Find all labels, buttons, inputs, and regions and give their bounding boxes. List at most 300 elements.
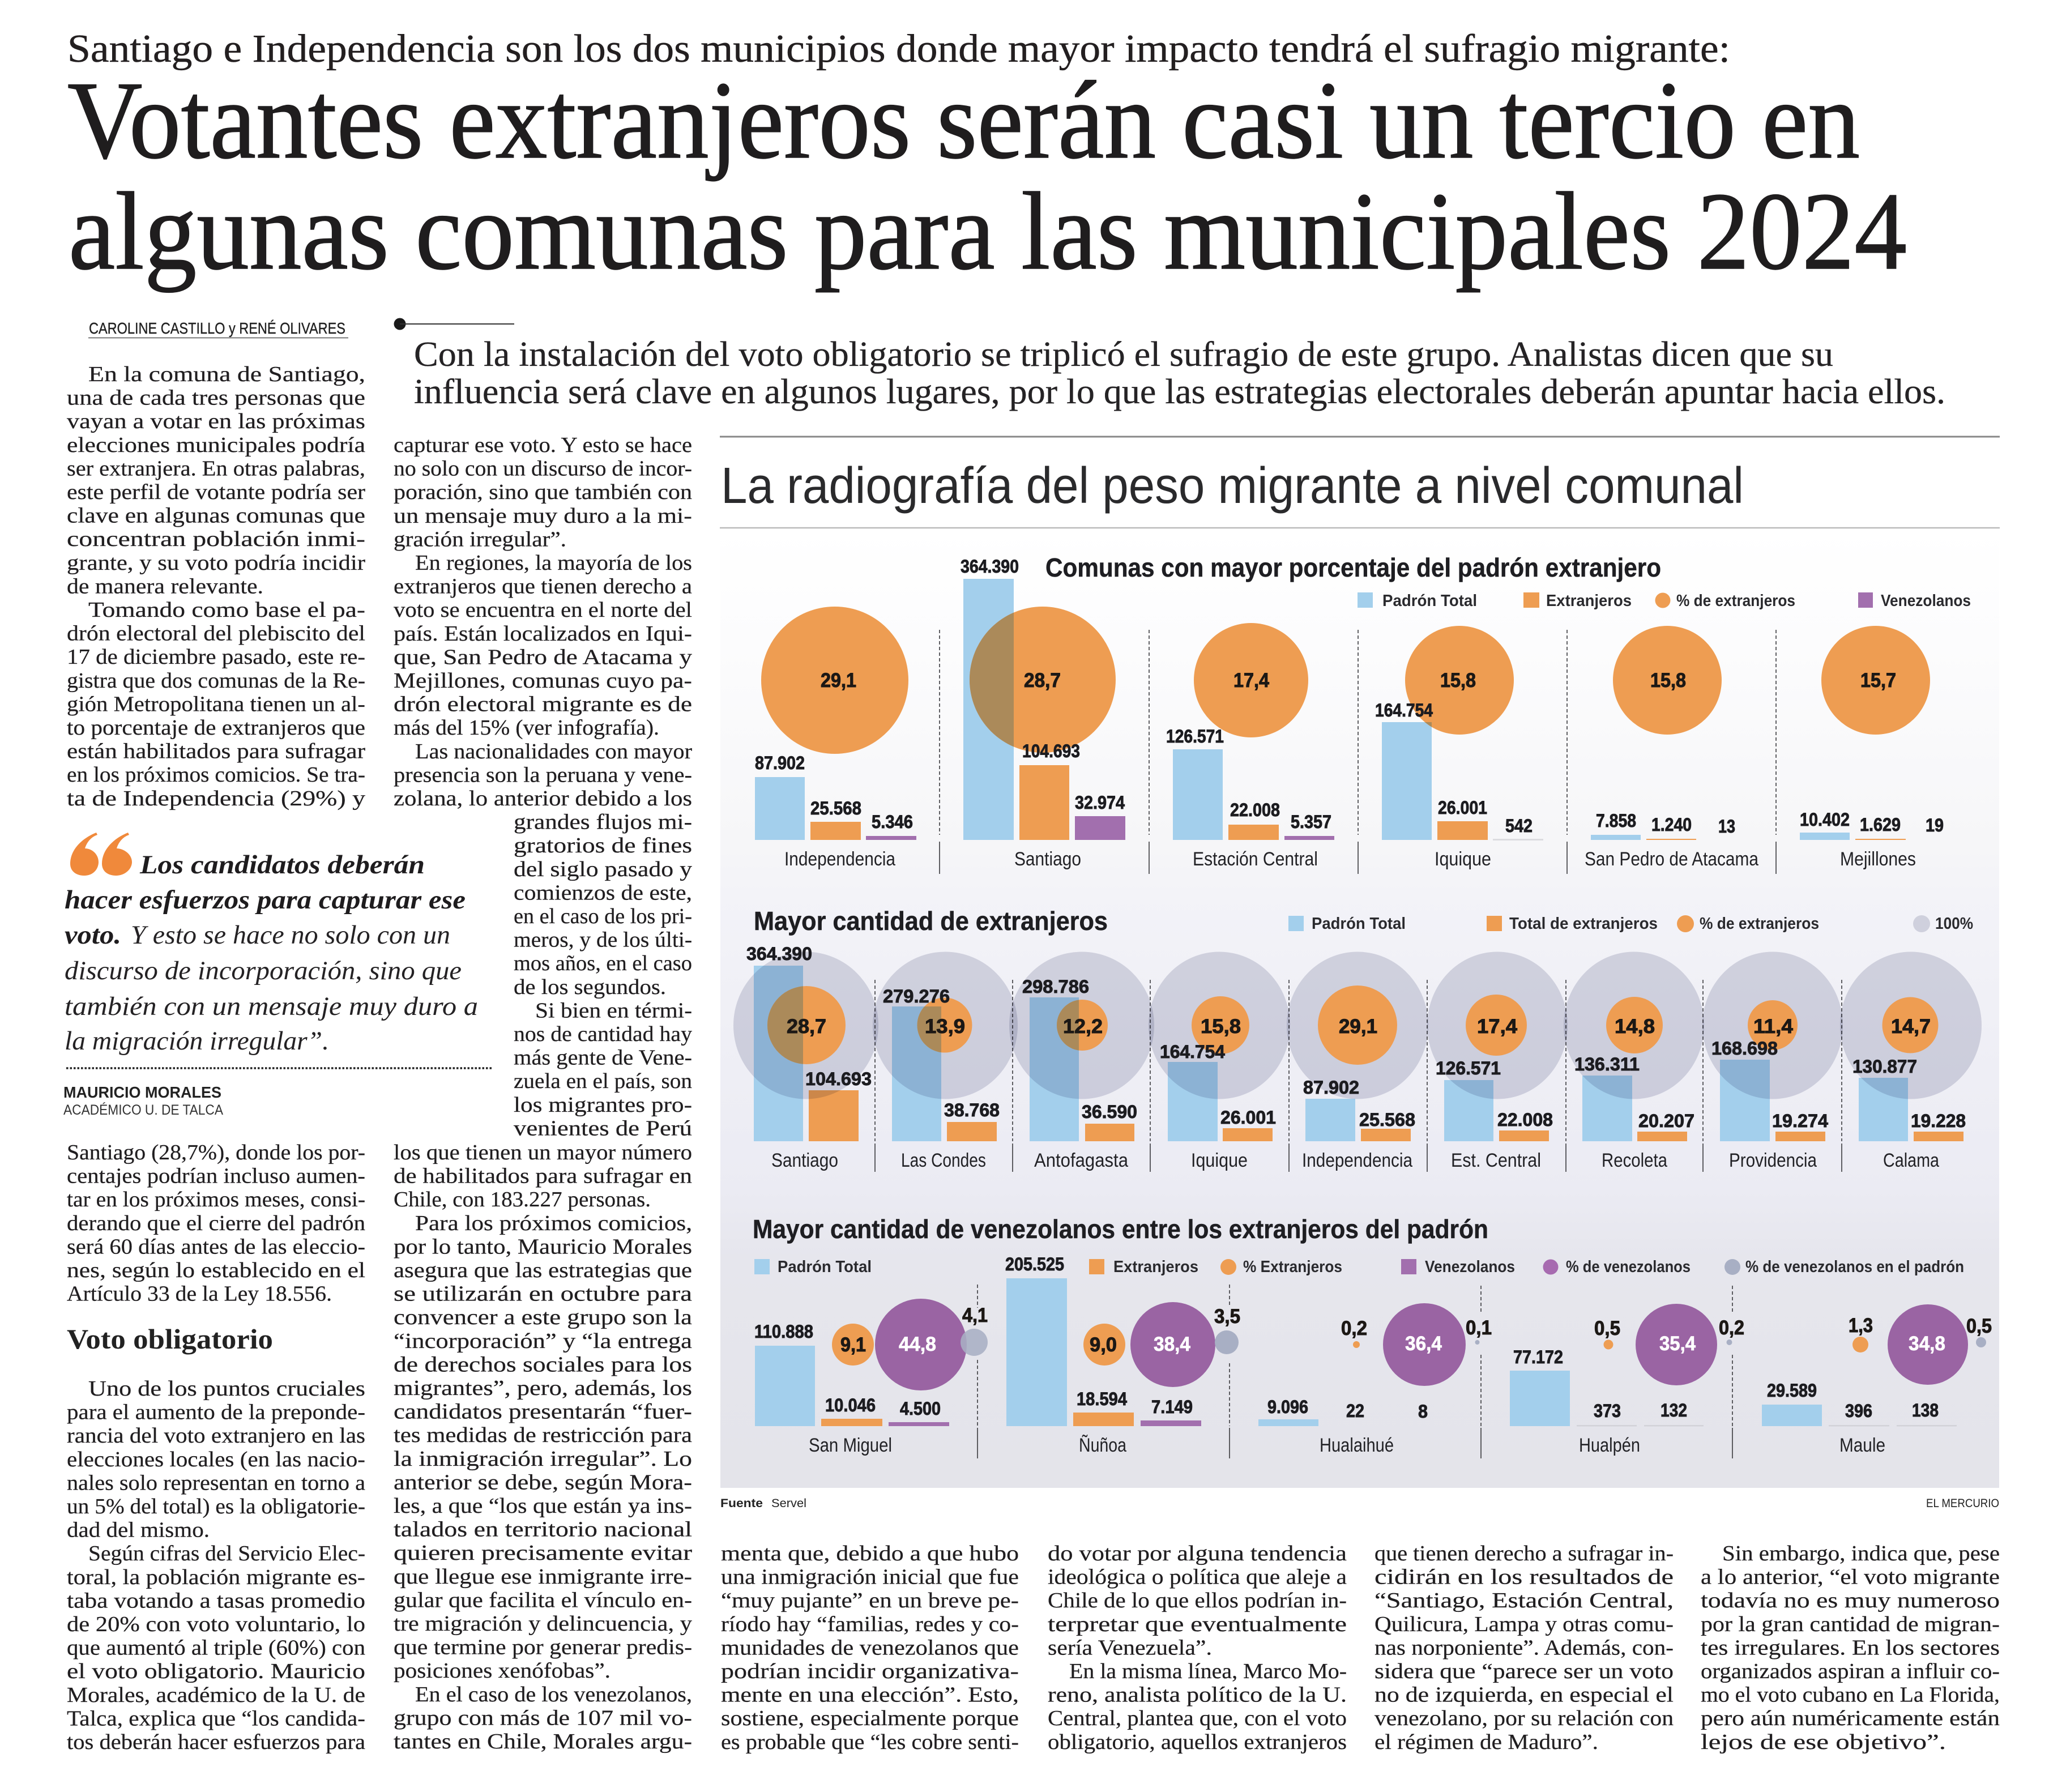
commune: Iquique: 164.754 <box>1160 1042 1225 1062</box>
commune: San Miguel: 44,8 <box>899 1333 936 1355</box>
article text: column 2: venientes de Perú <box>514 1116 692 1140</box>
article text: column 2: Para los próximos comicios, <box>415 1211 692 1235</box>
article text: column 6: por la gran cantidad de migran- <box>1701 1612 2000 1636</box>
article text: column 2: les, a que “los que están ya ins- <box>394 1494 692 1518</box>
commune: Ñuñoa: Ñuñoa <box>1079 1435 1126 1456</box>
commune: Providencia: 11,4 <box>1753 1016 1794 1038</box>
commune: Santiago: Santiago <box>771 1150 838 1171</box>
commune: Hualaihué: 9.096 <box>1267 1397 1308 1417</box>
article text: column 2: candidatos presentarán “fuer- <box>394 1400 692 1424</box>
commune: Antofagasta: 12,2 <box>1063 1016 1103 1038</box>
article text: column 2: Las nacionalidades con mayor <box>415 740 692 763</box>
article text: column 2: talados en territorio nacional <box>394 1518 692 1542</box>
chart 1 legend <box>1358 592 1971 610</box>
commune: Calama: 130.877 <box>1852 1056 1917 1077</box>
article text: column 4: En la misma línea, Marco Mo- <box>1069 1659 1347 1683</box>
title <box>67 59 1907 293</box>
chart 3 legend: Venezolanos <box>1425 1258 1515 1276</box>
article text: column 1, voto obligatorio: Uno de los puntos cruciales <box>88 1377 365 1401</box>
chart 3 legend: % de venezolanos en el padrón <box>1745 1258 1964 1276</box>
article text: column 6: tes irregulares. En los sectores <box>1701 1636 2000 1659</box>
commune: Antofagasta: 298.786 <box>1022 976 1089 997</box>
article text: column 1, voto obligatorio: de 20% con voto voluntario, lo <box>67 1612 365 1636</box>
commune: Independencia: 87.902 <box>755 753 805 773</box>
commune: San Pedro de Atacama: 1.240 <box>1651 814 1692 835</box>
article text: column 4: do votar por alguna tendencia <box>1048 1542 1347 1565</box>
article text: column 2: zuela en el país, son <box>514 1069 692 1093</box>
deck marker <box>394 318 514 330</box>
commune: Estación Central: 126.571 <box>1166 726 1224 746</box>
article text: column 3: podrían incidir organizativa- <box>721 1659 1019 1683</box>
quote attribution: MAURICIO MORALES <box>63 1083 221 1101</box>
article text: column 2: de habilitados para sufragar en <box>394 1164 692 1188</box>
article text: column 1, voto obligatorio: tos deberán hacer esfuerzos para <box>67 1730 365 1754</box>
commune: Ñuñoa: 9,0 <box>1090 1334 1117 1356</box>
article text: column 1, voto obligatorio: Talca, explica que “los candida- <box>67 1706 365 1730</box>
chart 2 legend: % de extranjeros <box>1700 915 1819 933</box>
commune: Estación Central: 5.357 <box>1291 812 1331 832</box>
article text: column 1, opening <box>67 362 365 810</box>
commune: Iquique: 542 <box>1505 816 1533 836</box>
commune: Santiago: 364.390 <box>961 556 1019 577</box>
commune: Hualpén: 132 <box>1661 1400 1687 1420</box>
article text: column 5: “Santiago, Estación Central, <box>1375 1589 1674 1612</box>
article text: column 3: ríodo hay “familias, redes y co- <box>721 1612 1019 1636</box>
commune: Estación Central: 22.008 <box>1230 800 1280 820</box>
chart 2 legend <box>1288 915 1973 933</box>
article text: column 1, voto obligatorio: elecciones locales (en las nacio- <box>67 1448 365 1471</box>
commune: Estación Central: 17,4 <box>1233 669 1269 692</box>
commune: Hualaihué <box>1258 1303 1492 1456</box>
article text: column 2: zolana, lo anterior debido a los <box>394 787 692 810</box>
article text: column 2: poración, sino que también con <box>394 480 692 504</box>
commune: Estación Central: Estación Central <box>1193 848 1318 870</box>
article text: column 1, opening: ser extranjera. En otras palabras, <box>67 456 365 480</box>
article text: column 2: más del 15% (ver infografía). <box>394 716 659 740</box>
commune: Las Condes: Las Condes <box>901 1150 986 1171</box>
title: algunas comunas para las municipales 2024 <box>69 170 1907 293</box>
article text: column 4: reno, analista político de la U. <box>1048 1683 1347 1707</box>
commune: Hualaihué: Hualaihué <box>1320 1435 1394 1456</box>
commune: Hualpén: 35,4 <box>1659 1333 1696 1355</box>
article text: column 2: Chile, con 183.227 personas. <box>394 1188 651 1211</box>
deck <box>414 335 1945 411</box>
article text: column 2: migrantes”, pero, además, los <box>394 1376 692 1400</box>
article text: column 1, continuation <box>67 1141 365 1306</box>
commune: Santiago: 104.693 <box>1022 741 1080 761</box>
commune: Iquique <box>1149 952 1290 1171</box>
article text: column 1, voto obligatorio: el voto obligatorio. Mauricio <box>67 1659 365 1683</box>
chart 2 legend: Padrón Total <box>1312 915 1406 933</box>
commune: Santiago: 32.974 <box>1075 792 1125 813</box>
chart 1 legend: Padrón Total <box>1382 592 1477 610</box>
commune: Las Condes: 38.768 <box>944 1100 1000 1120</box>
article text: column 2: gración irregular”. <box>394 527 566 551</box>
article text: column 2: del siglo pasado y <box>514 857 692 881</box>
article text: column 1, opening: gión Metropolitana tienen un al- <box>67 692 365 716</box>
article text: column 3: es probable que “les cobre senti- <box>721 1730 1019 1754</box>
commune: Ñuñoa: 205.525 <box>1005 1254 1064 1274</box>
article text: column 4: obligatorio, aquellos extranjeros <box>1048 1730 1347 1754</box>
article text: column 1, opening: en los próximos comicios. Se tra- <box>67 763 365 787</box>
commune: Estación Central <box>1166 623 1334 870</box>
article text: column 1, opening: grante, y su voto podría incidir <box>67 551 365 575</box>
article text: column 1, voto obligatorio <box>67 1377 365 1754</box>
commune: Hualpén: 0,2 <box>1719 1317 1744 1339</box>
commune: Maule <box>1762 1304 1992 1456</box>
article text: column 2: gratorios de fines <box>514 834 692 857</box>
commune: Ñuñoa: 3,5 <box>1214 1305 1240 1328</box>
article text: column 2: nos de cantidad hay <box>514 1022 692 1046</box>
chart 1 legend: Extranjeros <box>1546 592 1632 610</box>
article text: column 1, opening: drón electoral del plebiscito del <box>67 622 365 646</box>
commune: Independencia: Independencia <box>1302 1150 1412 1171</box>
chart 1 legend: Venezolanos <box>1881 592 1971 610</box>
chart 3 legend: % Extranjeros <box>1243 1258 1342 1276</box>
article text: column 3: menta que, debido a que hubo <box>721 1542 1019 1565</box>
article text: column 1, opening: ta de Independencia (29%) y <box>67 787 365 810</box>
article text: column 4: ideológica o política que aleje a <box>1048 1565 1347 1589</box>
article text: column 4: Central, plantea que, con el voto <box>1048 1706 1347 1730</box>
article text: column 2: En el caso de los venezolanos, <box>415 1683 692 1706</box>
article text: column 2: por lo tanto, Mauricio Morales <box>394 1235 692 1258</box>
commune: Recoleta: Recoleta <box>1602 1150 1667 1171</box>
article text: column 2: los migrantes pro- <box>514 1093 692 1117</box>
article text: column 1, opening: vayan a votar en las próximas <box>67 409 365 433</box>
article text: column 3: sostiene, especialmente porque <box>721 1706 1019 1730</box>
source note <box>720 1497 806 1510</box>
commune: Calama: 19.228 <box>1911 1111 1966 1131</box>
commune: Ñuñoa: 7.149 <box>1151 1397 1193 1417</box>
commune: Hualaihué: 22 <box>1346 1401 1364 1421</box>
article text: column 1, opening: gistra que dos comunas de la Re- <box>67 669 365 693</box>
commune: Iquique: 26.001 <box>1220 1107 1276 1128</box>
commune: San Miguel: San Miguel <box>809 1435 892 1456</box>
article text: column 1, opening: Tomando como base el pa- <box>88 598 365 622</box>
commune: Iquique: 15,8 <box>1201 1016 1241 1038</box>
article text: column 3: una inmigración inicial que fue <box>721 1565 1019 1589</box>
commune: Iquique: Iquique <box>1435 848 1491 870</box>
article text: column 2: quieren precisamente evitar <box>394 1541 692 1565</box>
commune: Antofagasta <box>1009 952 1154 1171</box>
article text: column 5 <box>1375 1542 1674 1754</box>
commune: Providencia: 168.698 <box>1711 1038 1778 1059</box>
article text: column 1, continuation: Artículo 33 de la Ley 18.556. <box>67 1282 332 1306</box>
commune: Est. Central <box>1427 952 1568 1171</box>
commune: Independencia <box>1287 952 1428 1171</box>
article text: column 2: presencia son la peruana y vene- <box>394 763 692 787</box>
commune: San Pedro de Atacama: 13 <box>1718 816 1735 837</box>
commune: Est. Central: 126.571 <box>1436 1058 1501 1078</box>
commune: Maule: Maule <box>1839 1435 1885 1456</box>
chart 2 heading: Mayor cantidad de extranjeros <box>754 906 1108 936</box>
article text: column 2: voto se encuentra en el norte del <box>394 598 692 622</box>
commune: Calama: 14,7 <box>1891 1016 1931 1038</box>
article text: column 1, opening: una de cada tres personas que <box>67 386 365 410</box>
chart 3 legend <box>754 1258 1964 1276</box>
subheading: voto obligatorio: Voto obligatorio <box>67 1323 273 1355</box>
commune: Recoleta: 20.207 <box>1638 1111 1694 1131</box>
commune: Hualaihué: 0,2 <box>1341 1317 1367 1339</box>
chart 2 legend: 100% <box>1935 915 1973 933</box>
commune: Independencia: 25.568 <box>1359 1110 1415 1130</box>
commune: San Pedro de Atacama: 7.858 <box>1596 810 1636 831</box>
article text: column 2: grandes flujos mi- <box>514 810 692 834</box>
article text: column 5: cidirán en los resultados de <box>1375 1565 1674 1589</box>
commune: Santiago: 28,7 <box>787 1016 826 1038</box>
pull quote <box>65 833 492 1068</box>
commune: Ñuñoa <box>1005 1254 1240 1456</box>
commune: Mejillones: Mejillones <box>1840 848 1916 870</box>
deck: Con la instalación del voto obligatorio se triplicó el sufragio de este grupo. Analistas dicen que su <box>414 335 1833 374</box>
commune: Est. Central: Est. Central <box>1451 1150 1541 1171</box>
article text: column 5: Quilicura, Lampa y otras comu- <box>1375 1612 1674 1636</box>
commune: Maule: 1,3 <box>1849 1315 1873 1337</box>
commune: Calama <box>1840 952 1982 1171</box>
article text: column 2: país. Están localizados en Iqui- <box>394 622 692 646</box>
commune: Antofagasta: Antofagasta <box>1034 1150 1128 1171</box>
article text: column 1, continuation: tar en los próximos meses, consi- <box>67 1188 365 1211</box>
article text: column 6: todavía no es muy numeroso <box>1701 1589 2000 1612</box>
article text: column 4 <box>1048 1542 1347 1754</box>
chart 1 separators <box>940 630 1776 874</box>
chart 3 legend: Padrón Total <box>778 1258 872 1276</box>
pull quote: también con un mensaje muy duro a <box>65 992 478 1021</box>
deck: influencia será clave en algunos lugares, por lo que las estrategias electorales deberán apuntar hacia ellos. <box>414 373 1945 411</box>
commune: Independencia: 29,1 <box>821 669 856 692</box>
commune: San Miguel: 9,1 <box>840 1334 866 1356</box>
pull quote: Y esto se hace no solo con un <box>131 920 450 950</box>
article text: column 1, opening: 17 de diciembre pasado, este re- <box>67 645 365 669</box>
article text: column 1, voto obligatorio: Morales, académico de la U. de <box>67 1683 365 1707</box>
article text: column 6: mo el voto cubano en La Florida, <box>1701 1683 2000 1707</box>
quote attribution <box>63 1083 223 1118</box>
chart 1 legend: % de extranjeros <box>1676 592 1795 610</box>
article text: column 2: comienzos de este, <box>514 881 692 904</box>
source note: Servel <box>771 1497 806 1510</box>
article text: column 5: que tienen derecho a sufragar in- <box>1375 1542 1674 1565</box>
chart 2 separators <box>875 980 1842 1172</box>
commune: Recoleta: 136.311 <box>1574 1054 1640 1074</box>
commune: Hualpén: 373 <box>1594 1401 1621 1421</box>
article text: column 1, opening: concentran población inmi- <box>67 527 365 551</box>
commune: Est. Central: 17,4 <box>1477 1016 1518 1038</box>
article text: column 1, voto obligatorio: toral, la población migrante es- <box>67 1565 365 1589</box>
panel: infographic background <box>720 529 1999 1488</box>
article text: column 6: Sin embargo, indica que, pese <box>1722 1542 2000 1565</box>
pull quote: hacer esfuerzos para capturar ese <box>65 885 466 915</box>
commune: San Miguel: 110.888 <box>754 1321 813 1342</box>
commune: San Pedro de Atacama <box>1585 626 1758 870</box>
pull quote: discurso de incorporación, sino que <box>65 956 462 985</box>
commune: Hualpén: Hualpén <box>1579 1435 1640 1456</box>
chart 2 legend: Total de extranjeros <box>1509 915 1658 933</box>
commune: Iquique <box>1375 626 1543 870</box>
article text: column 1, continuation: derando que el cierre del padrón <box>67 1211 365 1235</box>
commune: Independencia <box>755 607 916 870</box>
source note: Fuente <box>720 1497 763 1510</box>
chart 3 legend: % de venezolanos <box>1566 1258 1691 1276</box>
article text: column 2: posiciones xenófobas”. <box>394 1659 611 1683</box>
pull quote: la migración irregular”. <box>65 1026 329 1056</box>
credit: EL MERCURIO <box>1926 1497 1999 1510</box>
commune: Santiago: Santiago <box>1014 848 1081 870</box>
commune: Recoleta: 14,8 <box>1615 1016 1655 1038</box>
article text: column 1, voto obligatorio: que aumentó al triple (60%) con <box>67 1636 365 1660</box>
article text: column 2: extranjeros que tienen derecho a <box>394 575 692 599</box>
article text: column 2: la inmigración irregular”. Lo <box>394 1447 692 1471</box>
commune: Iquique: 26.001 <box>1438 797 1487 818</box>
pull quote: voto. <box>65 920 121 950</box>
chart 1 heading: Comunas con mayor porcentaje del padrón extranjero <box>1045 553 1661 582</box>
commune: Maule: 34,8 <box>1909 1333 1945 1355</box>
article text: column 2: gular que facilita el vínculo en- <box>394 1588 692 1612</box>
commune: San Miguel <box>754 1299 988 1456</box>
commune: Las Condes: 13,9 <box>925 1016 965 1038</box>
commune: Santiago: 28,7 <box>1024 669 1061 692</box>
byline: CAROLINE CASTILLO y RENÉ OLIVARES <box>89 319 345 337</box>
article text: column 5: venezolano, por su relación con <box>1375 1706 1674 1730</box>
commune: Providencia <box>1702 952 1843 1171</box>
commune: Recoleta <box>1564 952 1704 1171</box>
article text: column 3 <box>721 1542 1019 1754</box>
article text: column 2: “incorporación” y “la entrega <box>394 1329 692 1353</box>
article text: column 1, opening: están habilitados para sufragar <box>67 740 365 763</box>
commune: Las Condes <box>873 952 1018 1171</box>
commune: Maule: 29.589 <box>1767 1380 1817 1401</box>
article text: column 2: no solo con un discurso de incor- <box>394 457 692 481</box>
article text: column 1, continuation: centajes podrían incluso aumen- <box>67 1164 365 1188</box>
article text: column 6: a lo anterior, “el voto migrante <box>1701 1565 2000 1589</box>
article text: column 1, voto obligatorio: un 5% del total) es la obligatorie- <box>67 1495 365 1518</box>
article text: column 2: en el caso de los pri- <box>514 904 692 928</box>
commune: Providencia: Providencia <box>1729 1150 1817 1171</box>
article text: column 1, voto obligatorio: nales solo representan en torno a <box>67 1471 365 1495</box>
article text: column 5: sidera que “parece ser un voto <box>1375 1659 1674 1683</box>
article text: column 2: capturar ese voto. Y esto se hace <box>394 433 692 457</box>
commune: Hualaihué: 8 <box>1418 1401 1428 1422</box>
article text: column 2: asegura que las estrategias que <box>394 1258 692 1282</box>
article text: column 6: lejos de ese objetivo”. <box>1701 1730 1946 1754</box>
article text: column 2: tantes en Chile, Morales argu- <box>394 1730 692 1753</box>
commune: Hualpén: 77.172 <box>1513 1347 1563 1367</box>
article text: column 1, opening: En la comuna de Santiago, <box>88 362 365 386</box>
article text: column 2: los que tienen un mayor número <box>394 1141 692 1164</box>
article text: column 4: terpretar que eventualmente <box>1048 1612 1347 1636</box>
article text: column 2: de derechos sociales para los <box>394 1352 692 1376</box>
article text: column 1, continuation: Santiago (28,7%), donde los por- <box>67 1141 365 1164</box>
commune: Iquique: 15,8 <box>1440 669 1476 692</box>
commune: Independencia: 5.346 <box>872 812 913 832</box>
commune: Hualaihué: 36,4 <box>1405 1333 1442 1355</box>
article text: column 2: que llegue ese inmigrante irre- <box>394 1565 692 1589</box>
commune: San Pedro de Atacama: San Pedro de Atacama <box>1585 848 1758 870</box>
article text: column 1, opening: to porcentaje de extranjeros que <box>67 716 365 740</box>
commune: Iquique: Iquique <box>1191 1150 1248 1171</box>
chart 3 separators <box>977 1285 1732 1458</box>
commune: Maule: 396 <box>1845 1401 1872 1421</box>
article text: column 5: nas norponiente”. Además, con- <box>1375 1636 1674 1659</box>
article text: column 2: grupo con más de 107 mil vo- <box>394 1706 692 1730</box>
commune: Santiago <box>961 556 1125 870</box>
chart 3 legend: Extranjeros <box>1113 1258 1198 1276</box>
commune: Independencia: 25.568 <box>810 798 861 818</box>
kicker: Santiago e Independencia son los dos municipios donde mayor impacto tendrá el sufragio migrante: <box>67 27 1730 71</box>
commune: Antofagasta: 36.590 <box>1082 1102 1137 1122</box>
article text: column 3: mente en una elección”. Esto, <box>721 1683 1019 1707</box>
commune: Mejillones: 1.629 <box>1860 814 1901 835</box>
infographic top rule and heading: La radiografía del peso migrante a nivel comunal <box>721 458 1744 514</box>
article text: column 3: “muy pujante” en un breve pe- <box>721 1589 1019 1612</box>
commune: San Miguel: 4,1 <box>962 1304 988 1326</box>
article text: column 2: que termine por generar predis- <box>394 1636 692 1659</box>
article text: column 2: Si bien en térmi- <box>535 999 692 1022</box>
article text: column 2: más gente de Vene- <box>514 1046 692 1070</box>
article text: column 1, voto obligatorio: para el aumento de la preponde- <box>67 1401 365 1424</box>
article text: column 2: un mensaje muy duro a la mi- <box>394 504 692 528</box>
commune: Las Condes: 279.276 <box>883 986 950 1006</box>
article text: column 2: Mejillones, comunas cuyo pa- <box>394 669 692 693</box>
article text: column 5: el régimen de Maduro”. <box>1375 1730 1598 1754</box>
commune: Ñuñoa: 18.594 <box>1077 1389 1127 1409</box>
commune: Mejillones: 15,7 <box>1860 669 1896 692</box>
article text: column 1, opening: de manera relevante. <box>67 574 263 598</box>
commune: Independencia: 29,1 <box>1339 1016 1377 1038</box>
article text: column 2: se utilizarán en octubre para <box>394 1282 692 1306</box>
article text: column 1, voto obligatorio: Según cifras del Servicio Elec- <box>88 1542 365 1565</box>
pull quote: Los candidatos deberán <box>139 850 425 880</box>
article text: column 2: tre migración y delincuencia, y <box>394 1612 692 1636</box>
title: Votantes extranjeros serán casi un tercio en <box>67 59 1860 182</box>
article text: column 2: tes medidas de restricción para <box>394 1423 692 1447</box>
article text: column 1, voto obligatorio: taba votando a tasas promedio <box>67 1589 365 1612</box>
article text: column 6 <box>1701 1542 2000 1754</box>
article text: column 5: no de izquierda, en especial el <box>1375 1683 1674 1707</box>
article text: column 1, continuation: nes, según lo establecido en el <box>67 1258 365 1282</box>
commune: Calama: Calama <box>1883 1150 1939 1171</box>
article text: column 2: que, San Pedro de Atacama y <box>394 645 692 669</box>
article text: column 2: convencer a este grupo son la <box>394 1305 692 1329</box>
commune: Independencia: Independencia <box>784 848 895 870</box>
article text: column 1, continuation: será 60 días antes de las eleccio- <box>67 1235 365 1258</box>
commune: San Miguel: 10.046 <box>825 1395 876 1415</box>
commune: Providencia: 19.274 <box>1772 1111 1828 1131</box>
article text: column 2 <box>394 433 692 1753</box>
commune: Hualpén <box>1510 1304 1744 1456</box>
commune: Independencia: 87.902 <box>1303 1077 1359 1098</box>
commune: Santiago: 364.390 <box>746 944 812 964</box>
commune: Santiago <box>733 944 878 1171</box>
commune: Mejillones: 10.402 <box>1800 809 1850 830</box>
article text: column 3: munidades de venezolanos que <box>721 1636 1019 1659</box>
commune: Hualpén: 0,5 <box>1594 1317 1620 1339</box>
article text: column 1, opening: este perfil de votante podría ser <box>67 480 365 504</box>
article text: column 6: pero aún numéricamente están <box>1701 1706 2000 1730</box>
article text: column 2: meros, y de los últi- <box>514 928 692 952</box>
icon: orange quotation marks <box>70 833 132 876</box>
article text: column 1, voto obligatorio: rancia del voto extranjero en las <box>67 1424 365 1448</box>
article text: column 1, voto obligatorio: dad del mismo. <box>67 1518 210 1542</box>
commune: Maule: 0,5 <box>1966 1315 1992 1337</box>
article text: column 2: mos años, en el caso <box>514 952 692 975</box>
quote attribution: ACADÉMICO U. DE TALCA <box>63 1102 223 1118</box>
commune: Mejillones <box>1800 626 1944 870</box>
commune: Maule: 138 <box>1912 1400 1939 1420</box>
commune: Iquique: 164.754 <box>1375 700 1433 720</box>
article text: column 2: drón electoral migrante es de <box>394 693 692 716</box>
article text: column 4: Chile de lo que ellos podrían in- <box>1048 1589 1347 1612</box>
article text: column 1, opening: clave en algunas comunas que <box>67 504 365 528</box>
